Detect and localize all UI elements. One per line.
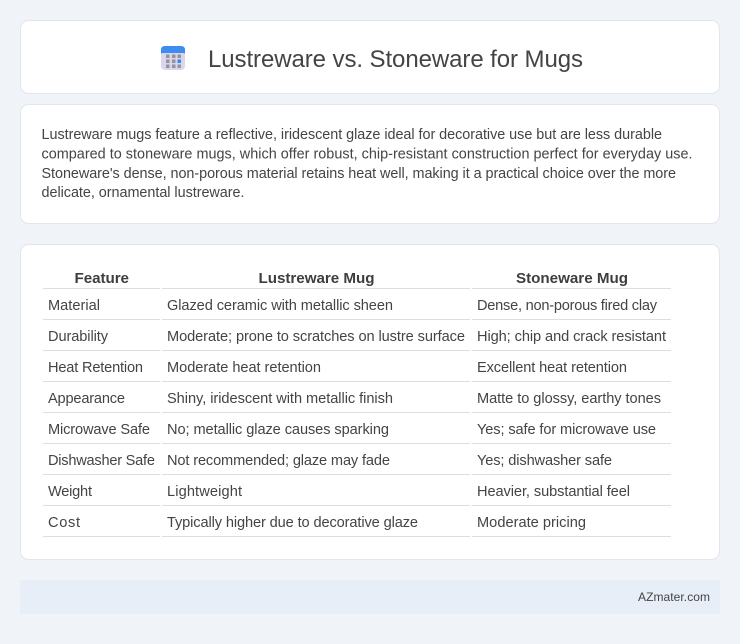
table header row — [74, 270, 628, 287]
title: Lustreware vs. Stoneware for Mugs — [208, 46, 583, 73]
summary paragraph: Stoneware's dense, non-porous material retains heat well, making it a practical choice over the more — [42, 166, 676, 182]
row: cost: Typically higher due to decorative glaze — [167, 515, 418, 531]
row: durability: Moderate; prone to scratches on lustre surface — [167, 329, 465, 345]
row: cost: Cost — [48, 515, 80, 531]
row: weight: Weight — [48, 484, 92, 500]
row: appearance: Matte to glossy, earthy tones — [477, 391, 661, 407]
row: dishwasher safe: Dishwasher Safe — [48, 453, 155, 469]
row: material: Glazed ceramic with metallic sheen — [167, 298, 393, 314]
row: appearance: Appearance — [48, 391, 125, 407]
table header row: Lustreware Mug — [258, 270, 374, 287]
row: dishwasher safe: Not recommended; glaze may fade — [167, 453, 390, 469]
row: microwave safe: No; metallic glaze causes sparking — [167, 422, 389, 438]
row: cost: Moderate pricing — [477, 515, 586, 531]
row: material: Material — [48, 298, 100, 314]
row: heat retention — [48, 360, 627, 376]
row: appearance: Shiny, iridescent with metallic finish — [167, 391, 393, 407]
row: weight — [48, 484, 630, 500]
summary paragraph: compared to stoneware mugs, which offer robust, chip-resistant construction perfect for everyday use. — [42, 146, 692, 162]
icon: calendar — [161, 46, 185, 70]
footer bar — [20, 580, 720, 614]
table header row: Stoneware Mug — [516, 270, 628, 287]
summary paragraph — [42, 127, 692, 201]
row: heat retention: Moderate heat retention — [167, 360, 321, 376]
summary paragraph: delicate, ornamental lustreware. — [42, 185, 244, 201]
row: dishwasher safe — [48, 453, 612, 469]
row: microwave safe: Yes; safe for microwave use — [477, 422, 656, 438]
table header row: Feature — [74, 270, 129, 287]
row: dishwasher safe: Yes; dishwasher safe — [477, 453, 612, 469]
row: weight: Lightweight — [167, 484, 242, 500]
row: heat retention: Heat Retention — [48, 360, 143, 376]
panel: comparison table — [20, 244, 720, 560]
row: durability — [48, 329, 666, 345]
summary paragraph: Lustreware mugs feature a reflective, iridescent glaze ideal for decorative use but are less durable — [42, 127, 662, 143]
row: appearance — [48, 391, 661, 407]
row: cost — [48, 515, 586, 531]
row: heat retention: Excellent heat retention — [477, 360, 627, 376]
row: microwave safe — [48, 422, 656, 438]
panel: summary — [20, 104, 720, 224]
row: microwave safe: Microwave Safe — [48, 422, 150, 438]
row: durability: High; chip and crack resistant — [477, 329, 666, 345]
footer credit: AZmater.com — [638, 590, 710, 604]
row: weight: Heavier, substantial feel — [477, 484, 630, 500]
row: durability: Durability — [48, 329, 109, 345]
row: material: Dense, non-porous fired clay — [477, 298, 658, 314]
row: material — [48, 298, 658, 314]
panel: title header — [20, 20, 720, 94]
